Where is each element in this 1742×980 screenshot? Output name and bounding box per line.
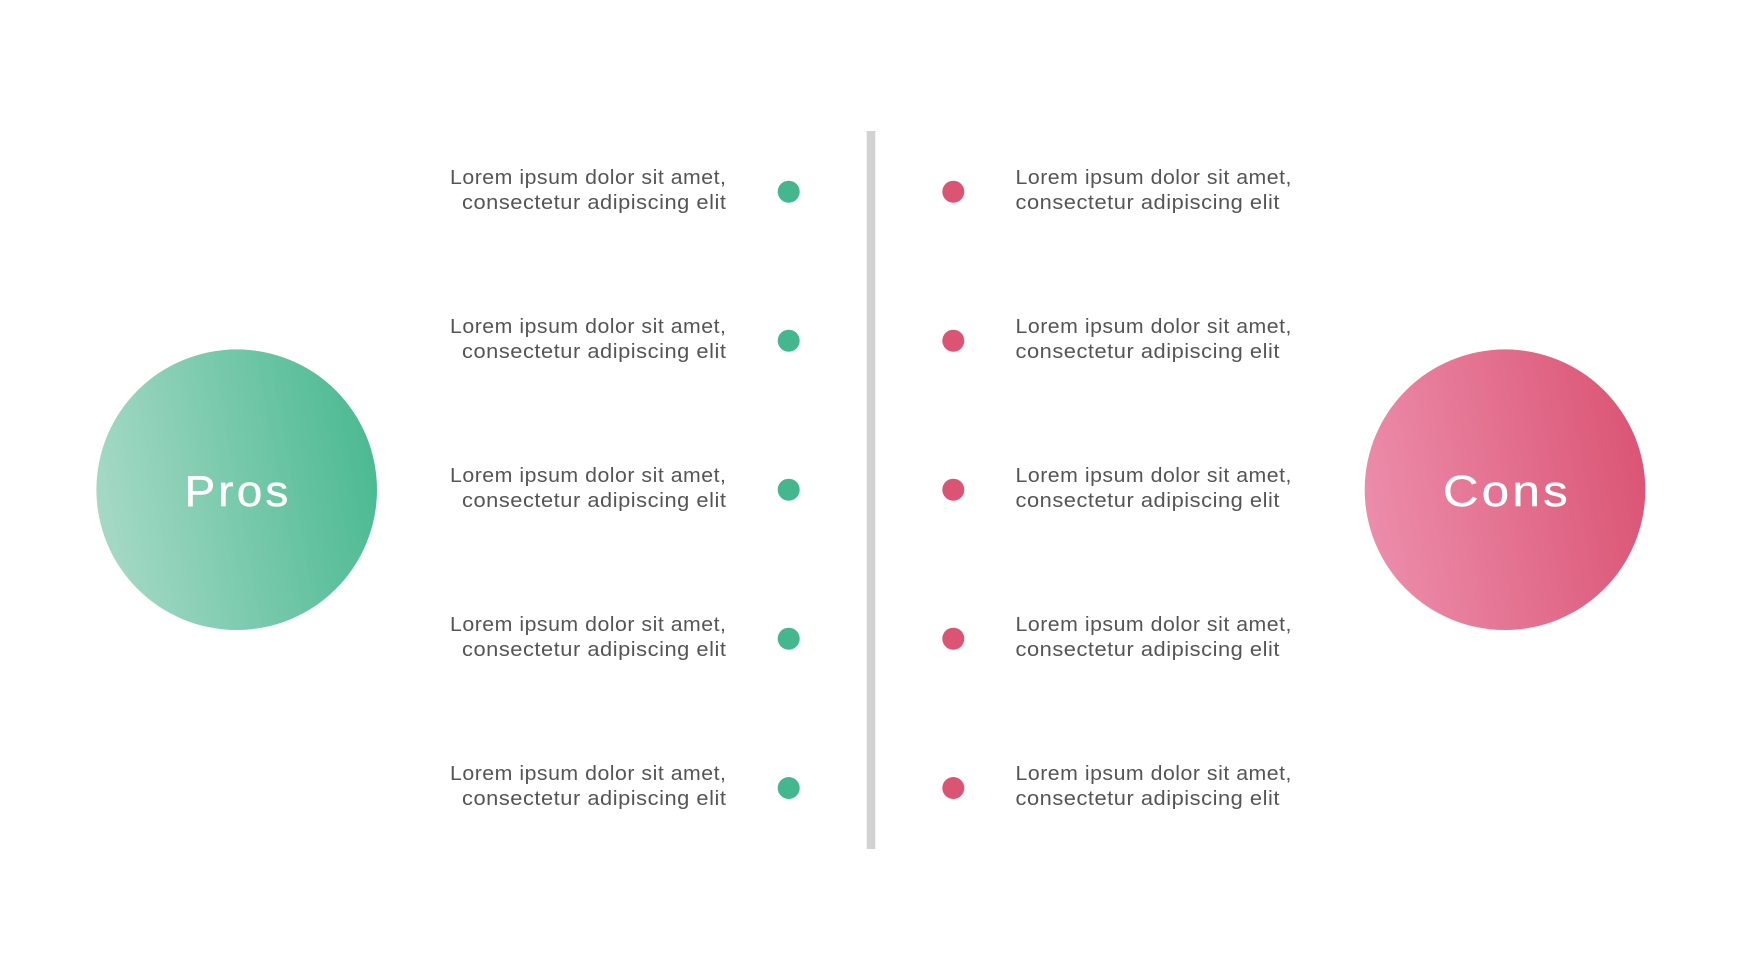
- pros item 5: Lorem ipsum dolor sit amet,: [450, 762, 726, 785]
- pros item 1: [450, 166, 800, 214]
- cons item 5: consectetur adipiscing elit: [1016, 787, 1280, 810]
- panel: cons list: [942, 166, 1292, 810]
- pros item 4: consectetur adipiscing elit: [462, 638, 726, 661]
- pros item 5: consectetur adipiscing elit: [462, 787, 726, 810]
- cons item 1: Lorem ipsum dolor sit amet,: [1016, 166, 1292, 189]
- pros item 2: Lorem ipsum dolor sit amet,: [450, 315, 726, 338]
- center divider: [867, 131, 875, 849]
- pros item 1: Lorem ipsum dolor sit amet,: [450, 166, 726, 189]
- panel: cons badge: Cons: [1443, 467, 1571, 516]
- cons item 3: [942, 464, 1292, 512]
- cons item 4: [942, 613, 1292, 661]
- cons item 2: Lorem ipsum dolor sit amet,: [1016, 315, 1292, 338]
- pros item 4: [450, 613, 800, 661]
- pros item 1: consectetur adipiscing elit: [462, 191, 726, 214]
- pros item 3: Lorem ipsum dolor sit amet,: [450, 464, 726, 487]
- panel: pros badge: [96, 349, 377, 630]
- pros item 3: [450, 464, 800, 512]
- cons item 4: consectetur adipiscing elit: [1016, 638, 1280, 661]
- cons item 1: consectetur adipiscing elit: [1016, 191, 1280, 214]
- panel: pros list: [450, 166, 800, 810]
- cons item 3: consectetur adipiscing elit: [1016, 489, 1280, 512]
- cons item 2: [942, 315, 1292, 363]
- cons item 4: Lorem ipsum dolor sit amet,: [1016, 613, 1292, 636]
- pros item 3: consectetur adipiscing elit: [462, 489, 726, 512]
- cons item 1: [942, 166, 1292, 214]
- panel: pros badge: Pros: [184, 467, 292, 516]
- pros item 2: [450, 315, 800, 363]
- cons item 2: consectetur adipiscing elit: [1016, 340, 1280, 363]
- cons item 5: [942, 762, 1292, 810]
- pros item 2: consectetur adipiscing elit: [462, 340, 726, 363]
- pros item 4: Lorem ipsum dolor sit amet,: [450, 613, 726, 636]
- panel: cons badge: [1365, 349, 1645, 630]
- cons item 5: Lorem ipsum dolor sit amet,: [1016, 762, 1292, 785]
- pros item 5: [450, 762, 800, 810]
- cons item 3: Lorem ipsum dolor sit amet,: [1016, 464, 1292, 487]
